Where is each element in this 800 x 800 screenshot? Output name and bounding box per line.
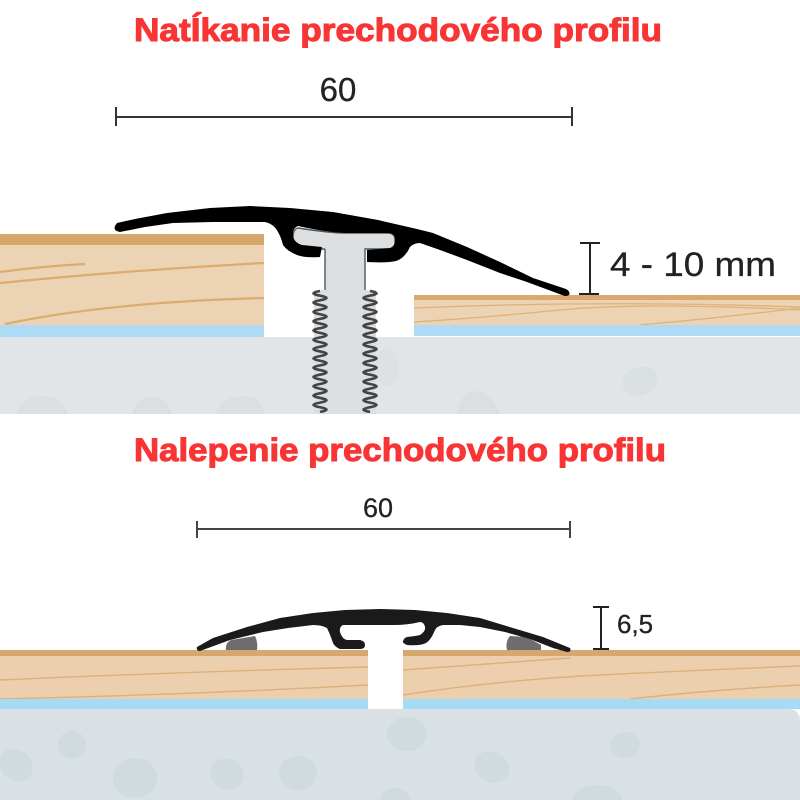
dimension: bottom width 60: 60	[363, 493, 393, 523]
dimension: 4 - 10 mm	[579, 243, 776, 294]
right floor board: top	[414, 295, 800, 336]
concrete subfloor: bottom	[0, 709, 800, 800]
transition profile: top	[115, 206, 570, 296]
screw	[293, 228, 395, 414]
transition profile: bottom	[197, 609, 571, 652]
dimension: top width 60: 60	[320, 71, 356, 108]
left floor board: bottom	[0, 650, 368, 709]
title: nailing section: NatÍkanie prechodového profilu	[134, 12, 662, 48]
right floor board: bottom	[403, 650, 800, 709]
adhesive strip: left	[226, 636, 257, 650]
title: gluing section: Nalepenie prechodového profilu	[134, 432, 666, 468]
dimension: 6,5: 6,5	[617, 609, 653, 639]
dimension: bottom width 60	[197, 493, 570, 538]
dimension: 6,5	[593, 607, 653, 649]
adhesive strip: right	[506, 636, 541, 650]
dimension: 4 - 10 mm: 4 - 10 mm	[610, 246, 776, 284]
left floor board: top	[0, 234, 264, 337]
dimension: top width 60	[116, 71, 572, 126]
concrete subfloor: top	[0, 337, 800, 414]
